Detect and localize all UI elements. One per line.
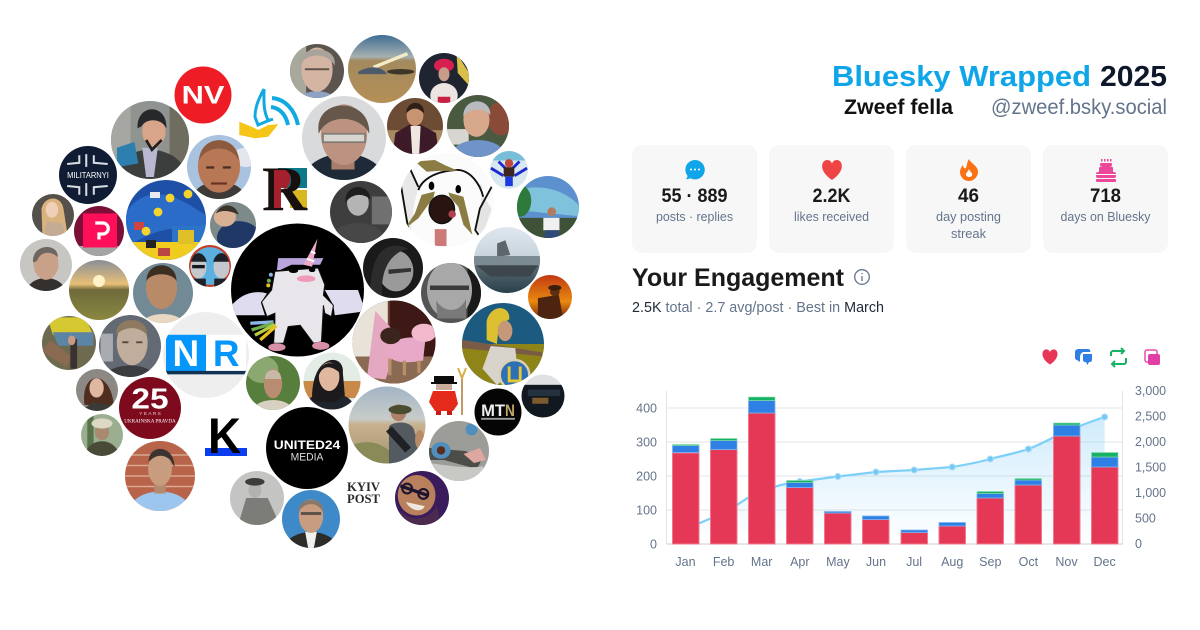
avatar: grey-haired man xyxy=(20,239,72,291)
avatar: flag rally xyxy=(42,316,96,370)
right axis labels xyxy=(1135,384,1166,551)
month labels: Dec xyxy=(1093,555,1116,569)
right axis labels: 1,000 xyxy=(1135,486,1166,500)
month labels: May xyxy=(826,555,850,569)
avatar: older man with glasses xyxy=(290,44,344,98)
stat card: days on Bluesky xyxy=(1043,145,1168,253)
engagement summary: 2.5K total · 2.7 avg/post · Best in March xyxy=(632,300,884,316)
stat card: posts and replies: 55 · 889 xyxy=(662,186,728,207)
avatar: two faces xyxy=(189,245,231,287)
icon: chat bubble xyxy=(685,160,705,179)
avatar: sunset field xyxy=(69,260,129,320)
stat card: likes xyxy=(769,145,894,253)
avatar: black and white portrait xyxy=(363,238,423,298)
avatar: bald man xyxy=(187,135,251,199)
avatar: 25 years Ukrainska Pravda xyxy=(119,377,181,439)
line markers xyxy=(797,414,1108,484)
icon: heart xyxy=(822,160,842,180)
stat card: likes: 2.2K xyxy=(812,186,851,207)
bars: replies xyxy=(672,400,1118,532)
right axis labels: 3,000 xyxy=(1135,384,1166,398)
month labels xyxy=(675,555,1116,569)
logo: Kyiv Post: KYIV xyxy=(347,479,381,494)
stat card: streak xyxy=(906,145,1031,253)
avatar: soldier in fire xyxy=(528,275,572,319)
avatar: soldier xyxy=(81,414,123,456)
logo: R monogram: R xyxy=(262,153,308,224)
stat card: days on Bluesky: 718 xyxy=(1090,186,1121,207)
month labels: Jun xyxy=(866,555,886,569)
chart legend xyxy=(1042,348,1160,367)
avatar: aircraft carrier xyxy=(474,227,540,293)
left axis labels xyxy=(636,402,657,552)
avatar: Athena warrior xyxy=(462,303,544,390)
avatar: man at brick wall xyxy=(125,441,195,511)
avatar: unicorn cat xyxy=(231,224,364,356)
month labels: Nov xyxy=(1055,555,1078,569)
logo: dove and signal xyxy=(239,89,298,138)
bars: likes xyxy=(672,413,1118,544)
avatar: cat eyes xyxy=(429,421,489,481)
month labels: Jul xyxy=(906,555,922,569)
avatar: fighter jet and pilot xyxy=(517,176,579,238)
legend: quotes xyxy=(1145,350,1160,365)
avatar: glasses man xyxy=(210,202,256,248)
legend: likes xyxy=(1042,349,1058,365)
right axis labels: 500 xyxy=(1135,512,1156,526)
month labels: Apr xyxy=(790,555,810,569)
engagement chart xyxy=(636,384,1166,569)
right axis labels: 0 xyxy=(1135,537,1142,551)
stat card: posts and replies xyxy=(632,145,757,253)
stat card: streak: day posting xyxy=(936,209,1001,224)
left axis labels: 200 xyxy=(636,470,657,484)
display name: Zweef fella xyxy=(844,96,953,119)
legend: reposts xyxy=(1111,348,1126,367)
stat card: days on Bluesky: days on Bluesky xyxy=(1060,209,1151,224)
avatar: bearded man black and white xyxy=(421,262,481,323)
legend: replies xyxy=(1075,349,1092,365)
avatar: helmet man xyxy=(111,101,189,179)
grid and axes xyxy=(666,391,1123,544)
cumulative line xyxy=(686,417,1105,529)
stat card: posts and replies: posts · replies xyxy=(656,209,733,224)
month labels: Sep xyxy=(979,555,1001,569)
logo: K on blue bar: K xyxy=(208,408,241,464)
avatar: man in burgundy jacket xyxy=(387,98,443,154)
month labels: Aug xyxy=(941,555,963,569)
avatar: man in suit on blue xyxy=(282,490,340,548)
right axis labels: 1,500 xyxy=(1135,460,1166,474)
avatar: United24 Media xyxy=(266,407,348,489)
right axis labels: 2,500 xyxy=(1135,410,1166,424)
avatar: laughing man purple xyxy=(395,471,449,525)
month labels: Jan xyxy=(675,555,696,569)
avatar: woman portrait xyxy=(76,369,118,411)
avatar: officer in uniform xyxy=(230,471,284,525)
left axis labels: 400 xyxy=(636,402,657,416)
title: Bluesky Wrapped xyxy=(832,61,1091,93)
stat card: streak: streak xyxy=(951,226,986,241)
avatar: wheat field rocket xyxy=(348,35,416,103)
avatar: man in hat over valley xyxy=(348,386,426,464)
logo: Kyiv Post: POST xyxy=(347,491,380,506)
stat card: streak: 46 xyxy=(958,186,979,207)
avatar: blonde woman xyxy=(32,194,74,236)
icon: flame xyxy=(960,159,978,181)
logo: beefeater pixel figure xyxy=(429,368,466,415)
avatar: woman in black xyxy=(304,352,360,410)
logo: Kyiv Post xyxy=(347,479,381,506)
avatar: small blue pixel figure xyxy=(490,151,528,189)
handle: @zweef.bsky.social xyxy=(991,96,1167,119)
icon: birthday cake xyxy=(1096,159,1116,182)
avatar: smiling older man xyxy=(447,95,509,157)
avatar: blond man portrait xyxy=(99,315,161,377)
left axis labels: 300 xyxy=(636,436,657,450)
avatar: Militarnyi logo xyxy=(59,146,117,204)
section heading: Your Engagement xyxy=(632,264,845,292)
avatar: big man with glasses xyxy=(302,96,386,180)
month labels: Feb xyxy=(713,555,734,569)
avatar: black and white man with glasses xyxy=(330,181,392,243)
avatar: EU flags map xyxy=(126,180,206,260)
stat card: likes: likes received xyxy=(794,209,869,224)
right axis labels: 2,000 xyxy=(1135,435,1166,449)
avatar: NV logo xyxy=(174,66,232,124)
bars: reposts xyxy=(672,397,1118,494)
avatar: dark ship xyxy=(522,374,564,418)
left axis labels: 100 xyxy=(636,504,657,518)
left axis labels: 0 xyxy=(650,538,657,552)
title: 2025 xyxy=(1100,61,1167,93)
month labels: Mar xyxy=(751,555,772,569)
avatar: pug in pink dress xyxy=(352,300,436,386)
avatar: pug with moustache xyxy=(401,160,492,246)
avatar: NR logo xyxy=(163,312,249,398)
icon: info xyxy=(855,270,869,284)
avatar bubble cloud xyxy=(20,35,579,564)
avatar: MTN logo xyxy=(474,388,522,436)
avatar: woman in Ukrainian wreath xyxy=(419,53,469,108)
avatar: smiling man xyxy=(133,263,193,323)
cumulative area xyxy=(686,417,1105,544)
month labels: Oct xyxy=(1019,555,1039,569)
avatar: man in garden xyxy=(246,356,300,410)
avatar: pink P logo xyxy=(74,206,124,258)
